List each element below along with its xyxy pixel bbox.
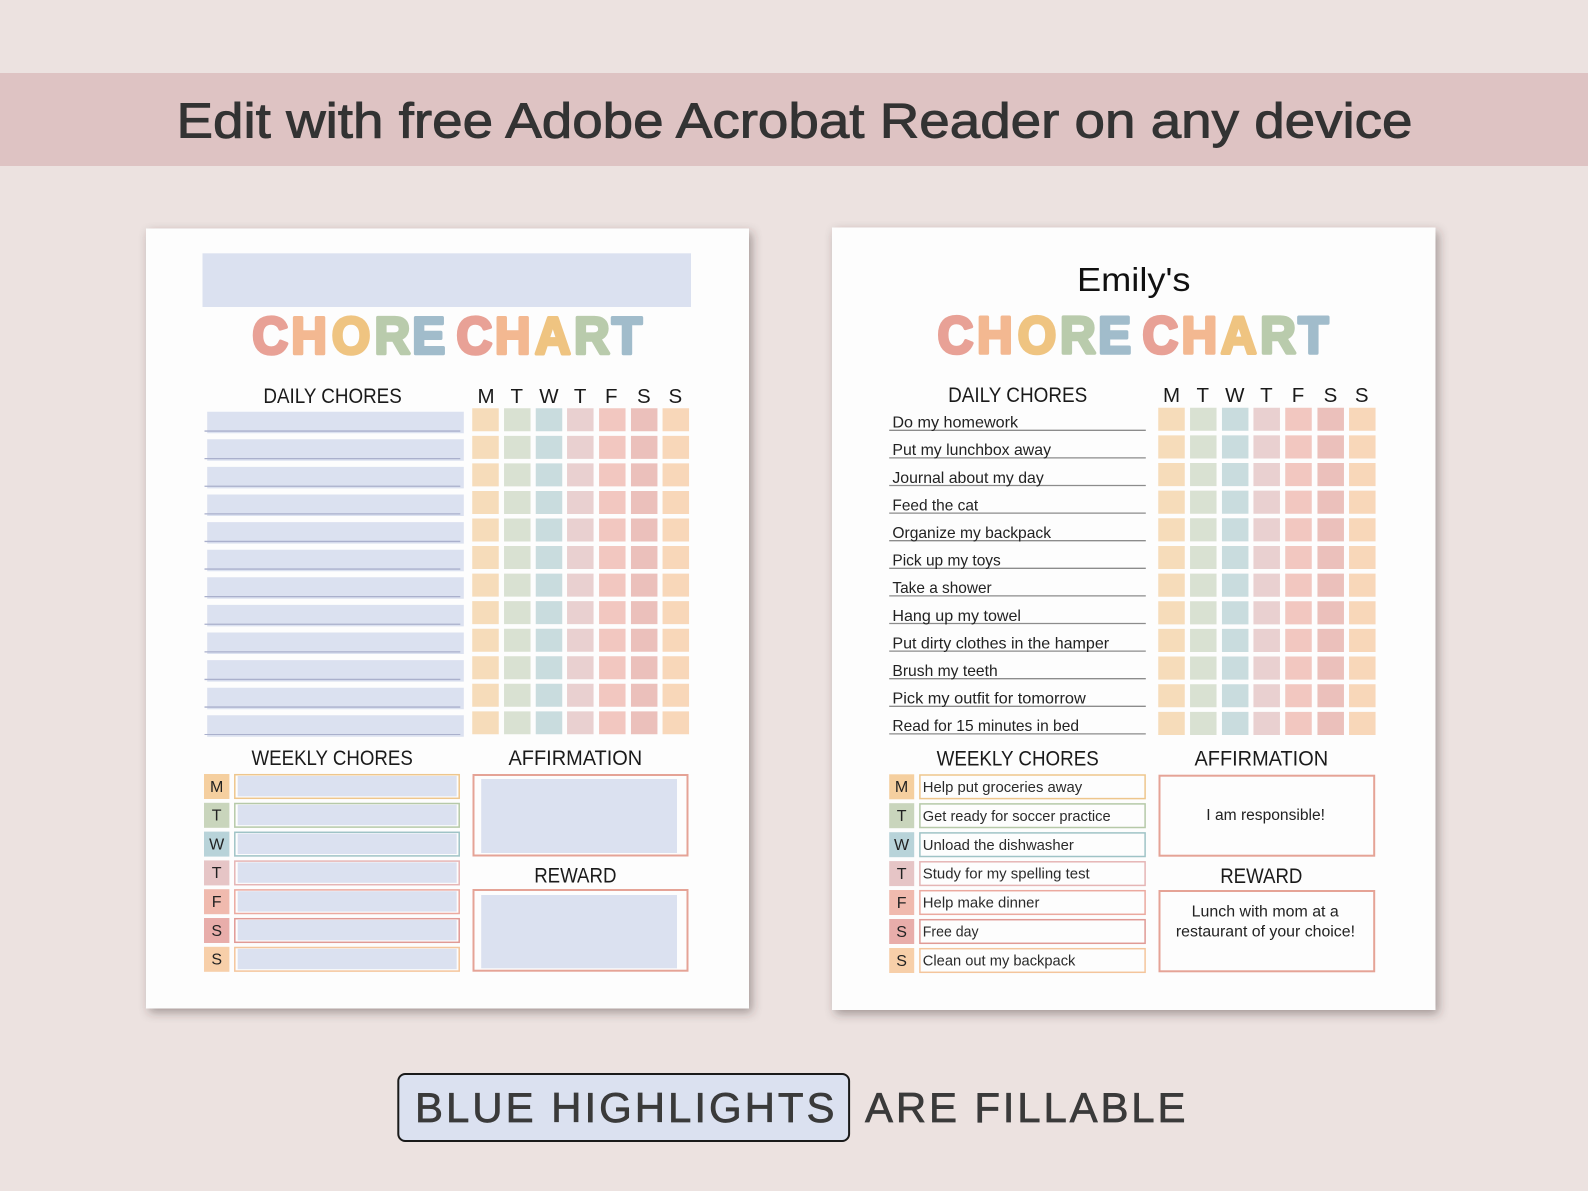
chart title: A [535,306,571,365]
weekday header letters: S [669,385,682,408]
daily chores heading: DAILY CHORES [263,384,402,408]
panel: blank fillable chore chart [146,228,749,1008]
reward box: Lunch with mom at a [1192,904,1339,921]
daily chore list: Brush my teeth [892,663,998,680]
chart title: E [412,306,445,365]
chart title: C [456,306,492,365]
chart title: R [375,306,410,365]
weekday header letters: M [477,385,495,408]
blank page sheet [146,228,749,1008]
caption highlighted words: BLUE HIGHLIGHTS [415,1084,834,1131]
weekly chore rows: Unload the dishwasher [923,837,1074,854]
chart title: R [1260,306,1296,364]
chart title: H [291,306,327,365]
weekly day tiles: M [895,779,908,796]
weekday header letters: F [1292,384,1304,407]
weekly day tiles: M [210,779,223,796]
weekly day tiles: S [896,953,907,970]
chart title: H [495,306,531,365]
daily chore list: Put dirty clothes in the hamper [892,635,1110,652]
bottom caption [398,1074,1186,1141]
weekly chore rows [920,775,1145,972]
weekly day tiles: F [897,895,907,912]
weekly day tiles: T [897,808,907,825]
banner band [0,73,1588,166]
weekly day tiles: S [211,952,222,969]
weekly chore rows: Get ready for soccer practice [923,808,1111,825]
chart title: R [574,306,610,365]
banner headline: Edit with free Adobe Acrobat Reader on any device [176,94,1412,148]
weekly day tiles: F [212,894,222,911]
top banner [0,73,1588,166]
weekday header letters: S [1355,384,1369,407]
reward heading: REWARD [1220,864,1302,888]
chart title: O [1018,306,1056,364]
daily chore list: Read for 15 minutes in bed [892,718,1079,735]
daily chores heading: DAILY CHORES [948,383,1087,407]
weekday header letters: T [574,385,587,408]
weekly day tiles: W [209,836,225,853]
weekday header letters: W [539,385,559,408]
weekday header letters: T [511,385,524,408]
weekly chores heading: WEEKLY CHORES [937,747,1099,771]
weekday header letters: M [1163,384,1180,407]
weekly day tiles: T [212,808,222,825]
affirmation heading: AFFIRMATION [508,746,642,770]
daily chore list: Take a shower [892,580,992,597]
weekly chore rows: Free day [923,924,979,941]
chart title: H [977,306,1013,364]
chart title: O [332,306,370,365]
daily chore list: Pick up my toys [892,553,1001,570]
chart title: T [612,306,642,365]
chart title: C [252,306,288,365]
weekly day tiles: W [894,837,910,854]
blue highlight label [398,1074,849,1141]
daily chore list: Hang up my towel [892,608,1021,625]
daily chore list [889,415,1146,735]
affirmation box: I am responsible! [1206,807,1325,824]
daily chore list: Do my homework [892,415,1019,432]
weekly day tiles [889,774,914,973]
chart title: T [1298,306,1328,364]
affirmation box [474,775,688,856]
weekday header letters: T [1260,384,1273,407]
weekly chore rows: Clean out my backpack [923,953,1076,970]
weekday header letters [477,385,682,408]
chart title: A [1221,306,1257,364]
chart title: C [938,306,973,364]
chart title: R [1060,306,1096,364]
fillable daily chore rows [332,412,336,737]
weekly chores heading: WEEKLY CHORES [252,746,413,770]
daily chore list: Journal about my day [892,470,1044,487]
panel: completed chore chart example [832,228,1436,1010]
checkbox grid [1172,408,1362,735]
weekly chore rows: Help make dinner [923,895,1039,912]
child name: Emily's [1077,261,1190,298]
daily chore list: Put my lunchbox away [892,442,1051,459]
affirmation box [1160,776,1374,856]
weekday header letters: W [1225,384,1245,407]
weekly fillable rows [235,775,459,971]
reward heading: REWARD [534,863,616,887]
caption plain words: ARE FILLABLE [865,1084,1186,1131]
chart title: H [1182,306,1217,364]
reward box: restaurant of your choice! [1176,924,1355,941]
weekday header letters: S [1324,384,1337,407]
reward box [474,890,688,971]
weekly day tiles: T [897,866,907,883]
weekday header letters: F [605,385,618,408]
weekly day tiles: S [211,923,222,940]
weekly day tiles [204,774,229,972]
checkbox grid [486,408,676,734]
weekday header letters: T [1197,384,1210,407]
weekly day tiles: S [896,924,907,941]
fillable name highlight [202,253,691,307]
weekly day tiles: T [212,865,222,882]
daily chore list: Feed the cat [892,497,979,514]
daily chore list: Pick my outfit for tomorrow [892,691,1086,708]
weekday header letters: S [637,385,651,408]
daily chore list: Organize my backpack [892,525,1052,542]
reward box [1160,891,1374,971]
weekly chore rows: Study for my spelling test [923,866,1091,883]
example page sheet [832,228,1436,1010]
weekday header letters [1163,384,1369,407]
affirmation heading: AFFIRMATION [1194,747,1328,771]
chart title: C [1142,306,1178,364]
chart title: E [1098,306,1131,364]
weekly chore rows: Help put groceries away [923,779,1083,796]
